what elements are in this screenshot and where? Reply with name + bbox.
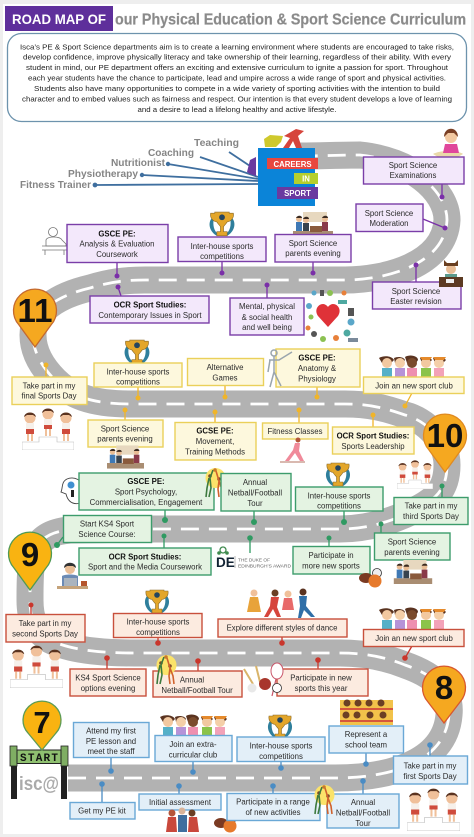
box: annual netball football tour — [153, 658, 242, 697]
box: GSCE PE analysis and evaluation: GSCE PE: — [98, 230, 136, 238]
box: third sports day — [394, 484, 468, 524]
box: GSCE PE anatomy — [276, 349, 360, 400]
start sign: START — [20, 753, 58, 765]
box: participate in new sports: sports this year — [295, 684, 348, 693]
careers in sport book: CAREERS — [273, 160, 312, 169]
box: annual netball football tour: Tour — [247, 499, 263, 508]
box: attend first PE lesson: meet the staff — [87, 747, 135, 756]
icon: parents evening — [107, 445, 144, 469]
box: participate in more new sports — [293, 536, 370, 574]
intro text panel: character and to embed values such as fairness and respect. Our intention is that every student develops a love of learning — [22, 94, 452, 104]
box: sport science moderation: Moderation — [369, 219, 409, 228]
box: OCR sport and media: Sport and the Media Coursework — [88, 562, 202, 572]
icon: student reading — [433, 129, 463, 157]
box: GCSE PE movement: Movement, — [196, 437, 234, 446]
box: alternative games: Alternative — [207, 363, 243, 372]
box: explore styles of dance — [218, 619, 347, 646]
start sign: isc@ — [19, 774, 59, 795]
box: join extra-curricular club: curricular club — [169, 750, 218, 760]
box: sport science moderation: Sport Science — [365, 209, 413, 218]
box: mental physical social health: & social health — [242, 313, 292, 322]
icon: student at laptop — [57, 563, 88, 589]
careers in sport book: SPORT — [284, 189, 311, 198]
box: inter-house sports competitions: Inter-house sports — [127, 618, 190, 626]
box: get my PE kit: Get my PE kit — [78, 806, 127, 816]
box: attend first PE lesson — [74, 722, 149, 774]
box: participate in range of activities: of new activities — [245, 808, 301, 817]
box: OCR contemporary issues: Contemporary Issues in Sport — [98, 311, 202, 320]
box: start KS4 sport science — [54, 516, 152, 548]
box: get my PE kit — [70, 781, 135, 819]
intro text panel: develop confidence, improve physically literacy and take ownership of their learning, regardless of their ability. With every — [23, 52, 451, 62]
box: first sports day: first Sports Day — [403, 772, 457, 781]
box: fitness classes: Fitness Classes — [267, 427, 323, 436]
box: KS4 options evening: options evening — [81, 684, 135, 693]
box: inter-house sports competitions — [94, 363, 182, 400]
box: inter-house sports competitions: Inter-house sports — [107, 368, 170, 376]
box: GSCE PE sport psychology: Commercialisation, Engagement — [90, 498, 203, 507]
box: inter-house sports competitions — [296, 487, 383, 525]
pin 8: 8 — [435, 669, 453, 706]
box: GSCE PE sport psychology — [79, 473, 214, 523]
icon: skeleton — [268, 350, 292, 387]
careers labels: Fitness Trainer — [20, 179, 91, 191]
box: first sports day — [394, 742, 468, 784]
box: OCR sports leadership — [332, 412, 414, 454]
box: explore styles of dance: Explore different styles of dance — [227, 624, 337, 632]
box: attend first PE lesson: Attend my first — [86, 726, 137, 736]
box: sport science moderation — [356, 204, 448, 232]
box: inter-house sports competitions: Inter-house sports — [308, 492, 371, 500]
box: annual netball football tour — [327, 778, 399, 828]
box: fitness classes — [262, 408, 328, 439]
pin 9: 9 — [21, 536, 39, 573]
box: participate in new sports: Participate in new — [290, 674, 352, 682]
box: sport science easter revision — [372, 262, 461, 309]
box: annual netball football tour: Netball/Football — [228, 488, 282, 498]
icon: trophy — [125, 340, 149, 364]
Duke of Edinburgh logo — [216, 547, 292, 570]
box: sport science parents evening: parents evening — [384, 548, 440, 557]
careers labels: Physiotherapy — [68, 168, 138, 180]
box: OCR sports leadership: Sports Leadership — [341, 442, 405, 451]
box: OCR sports leadership: OCR Sport Studies: — [337, 432, 409, 440]
box: inter-house sports competitions: competitions — [259, 752, 303, 761]
box: GSCE PE analysis and evaluation — [67, 224, 168, 278]
box: KS4 options evening: KS4 Sport Science — [75, 674, 141, 682]
box: participate in more new sports: Participate in — [308, 551, 354, 560]
icon: children group — [379, 356, 446, 377]
box: OCR contemporary issues — [90, 284, 209, 323]
intro text panel — [8, 34, 466, 122]
box: represent a school team: school team — [345, 740, 387, 750]
icon: sports balls — [214, 814, 236, 832]
icon: netball team — [166, 808, 199, 832]
careers labels — [20, 137, 239, 191]
title banner: ROAD MAP OF — [12, 12, 106, 27]
box: second sports day — [6, 602, 85, 642]
box: second sports day: second Sports Day — [12, 630, 78, 638]
box: sport science parents evening: Sport Science — [289, 239, 337, 248]
Duke of Edinburgh logo: EDINBURGH’S AWARD — [238, 564, 292, 568]
icon: children group — [160, 715, 227, 736]
box: inter-house sports competitions: Inter-house sports — [191, 242, 254, 251]
box: start KS4 sport science: Science Course: — [78, 530, 136, 539]
box: final sports day: Take part in my — [23, 382, 76, 390]
icon: student writing exam — [42, 228, 67, 255]
box: sport science easter revision: Easter revision — [390, 297, 442, 306]
careers labels: Coaching — [148, 147, 194, 159]
box: sport science easter revision: Sport Science — [392, 287, 440, 296]
intro text panel: student in mind, our PE department offers an exciting and extensive curriculum to ignite a passion for sport. Throughout — [26, 63, 448, 72]
box: KS4 options evening — [70, 655, 146, 696]
box: annual netball football tour: Netball/Football — [336, 808, 390, 818]
box: sport science parents evening — [88, 408, 163, 447]
box: join extra-curricular club — [155, 736, 232, 775]
box: OCR sport and media — [79, 534, 211, 575]
box: GSCE PE anatomy: Physiology — [298, 374, 336, 384]
box: sport science examinations: Examinations — [390, 171, 436, 180]
careers in sport book — [247, 129, 318, 206]
box: sport science parents evening — [374, 522, 450, 560]
icon: teacher at desk — [439, 260, 463, 287]
box: annual netball football tour: Netball/Football Tour — [161, 686, 233, 695]
icon: trophy — [268, 715, 292, 738]
icon: podium — [10, 646, 63, 688]
icon: school team — [340, 700, 393, 725]
box: GCSE PE movement: GCSE PE: — [196, 426, 234, 436]
pin 8 — [422, 666, 466, 723]
box: join a new sport club: Join an new sport club — [375, 634, 453, 643]
icon: trophy — [145, 590, 169, 613]
intro text panel: and a desire to lead a lifelong healthy and active lifestyle. — [138, 105, 336, 114]
box: mental physical social health — [230, 282, 304, 335]
intro text panel: Isca’s PE & Sport Science departments aim is to create a learning environment where students are encouraged to take risks, — [20, 42, 454, 52]
box: participate in new sports — [277, 657, 368, 696]
box: final sports day — [12, 362, 87, 404]
box: represent a school team: Represent a — [345, 730, 388, 739]
pin 10 — [424, 414, 466, 472]
box: annual netball football tour — [221, 474, 291, 525]
careers labels: Nutritionist — [111, 157, 165, 169]
road — [30, 155, 449, 778]
box: inter-house sports competitions: competitions — [200, 252, 244, 261]
box: start KS4 sport science: Start KS4 Sport — [80, 520, 135, 528]
box: sport science parents evening: parents evening — [285, 249, 341, 258]
box: GSCE PE analysis and evaluation: Analysis & Evaluation — [80, 240, 154, 248]
box: OCR contemporary issues: OCR Sport Studies: — [114, 300, 186, 310]
intro text panel: Students also have many opportunities to compete in a wide variety of sporting activities with the intention to build — [34, 84, 440, 93]
start sign — [10, 746, 68, 799]
box: inter-house sports competitions — [178, 237, 266, 276]
pin 7: 7 — [33, 705, 51, 740]
box: initial assessment — [139, 783, 221, 810]
pin 11: 11 — [18, 292, 52, 329]
box: mental physical social health: and well being — [242, 323, 292, 332]
box: annual netball football tour: Annual — [351, 798, 375, 807]
pin 10: 10 — [427, 417, 463, 454]
Duke of Edinburgh logo: DE — [216, 555, 235, 570]
icon: trophy — [210, 212, 234, 236]
box: alternative games — [188, 358, 264, 400]
box: annual netball football tour: Annual — [180, 676, 204, 684]
box: annual netball football tour: Annual — [243, 478, 267, 487]
pin 7 — [23, 701, 61, 750]
box: sport science parents evening: Sport Science — [101, 424, 149, 434]
box: mental physical social health: Mental, physical — [239, 302, 295, 311]
box: sport science parents evening — [275, 234, 351, 276]
box: GSCE PE sport psychology: Sport Psychology, — [115, 488, 177, 496]
box: inter-house sports competitions: competitions — [317, 502, 361, 510]
icon: netball players — [314, 785, 334, 814]
pin 9 — [8, 532, 52, 590]
icon: parents evening — [394, 560, 432, 584]
box: third sports day: third Sports Day — [403, 512, 459, 521]
icon: fitness woman — [280, 438, 305, 463]
box: initial assessment: Initial assessment — [149, 798, 212, 807]
box: sport science examinations: Sport Science — [389, 161, 437, 170]
icon: netball players — [156, 655, 176, 684]
box: OCR sport and media: OCR Sport Studies: — [109, 552, 181, 562]
connector dot — [247, 535, 253, 553]
Duke of Edinburgh logo: THE DUKE OF — [238, 558, 270, 562]
icon: health heart — [306, 290, 358, 342]
box: join a new sport club — [364, 630, 464, 661]
box: alternative games: Games — [212, 374, 238, 382]
icon: podium — [397, 460, 433, 489]
icon: sports equipment — [244, 663, 283, 696]
icon: podium — [407, 789, 460, 831]
box: sport science examinations — [364, 157, 464, 200]
box: annual netball football tour: Tour — [355, 819, 371, 828]
box: inter-house sports competitions: Inter-house sports — [250, 742, 313, 750]
box: GSCE PE anatomy: GSCE PE: — [298, 354, 336, 362]
icon: parents evening — [293, 212, 333, 237]
icon: netball players — [206, 468, 226, 497]
box: participate in range of activities — [227, 783, 320, 820]
icon: children group — [379, 608, 446, 629]
icon: dancers — [247, 588, 315, 618]
pin 11 — [13, 289, 56, 347]
box: participate in more new sports: more new sports — [302, 562, 360, 570]
icon: trophy — [326, 463, 350, 486]
box: sport science parents evening: Sport Science — [388, 538, 436, 546]
box: attend first PE lesson: PE lesson and — [86, 737, 136, 746]
box: second sports day: Take part in my — [19, 619, 72, 628]
icon: brain head — [61, 478, 83, 504]
careers in sport book: IN — [302, 174, 310, 184]
box: inter-house sports competitions — [237, 737, 325, 771]
box: join extra-curricular club: Join an extra- — [169, 740, 217, 749]
box: inter-house sports competitions — [114, 614, 202, 646]
box: final sports day: final Sports Day — [21, 392, 77, 400]
box: GCSE PE movement — [175, 410, 256, 460]
box: GSCE PE anatomy: Anatomy & — [298, 364, 337, 373]
careers labels: Teaching — [194, 137, 239, 149]
box: GCSE PE movement: Training Methods — [185, 448, 245, 456]
box: join a new sport club: Join an new sport club — [375, 382, 453, 390]
box: represent a school team — [329, 726, 404, 767]
box: inter-house sports competitions: competitions — [136, 628, 180, 637]
career arrows — [94, 152, 258, 186]
box: GSCE PE analysis and evaluation: Coursework — [96, 250, 138, 259]
box: third sports day: Take part in my — [405, 502, 458, 510]
icon: sports balls — [359, 568, 382, 588]
box: inter-house sports competitions: competitions — [116, 378, 160, 386]
box: participate in range of activities: Participate in a range — [236, 798, 310, 806]
title banner — [5, 6, 113, 31]
box: GSCE PE sport psychology: GSCE PE: — [127, 477, 165, 486]
intro text panel: each year students have the chance to participate, lead and umpire across a wide range of sport and physical activities. — [28, 74, 446, 82]
box: sport science parents evening: parents evening — [97, 434, 153, 444]
box: join a new sport club — [364, 377, 464, 408]
icon: podium — [22, 408, 74, 450]
box: first sports day: Take part in my — [404, 762, 457, 770]
